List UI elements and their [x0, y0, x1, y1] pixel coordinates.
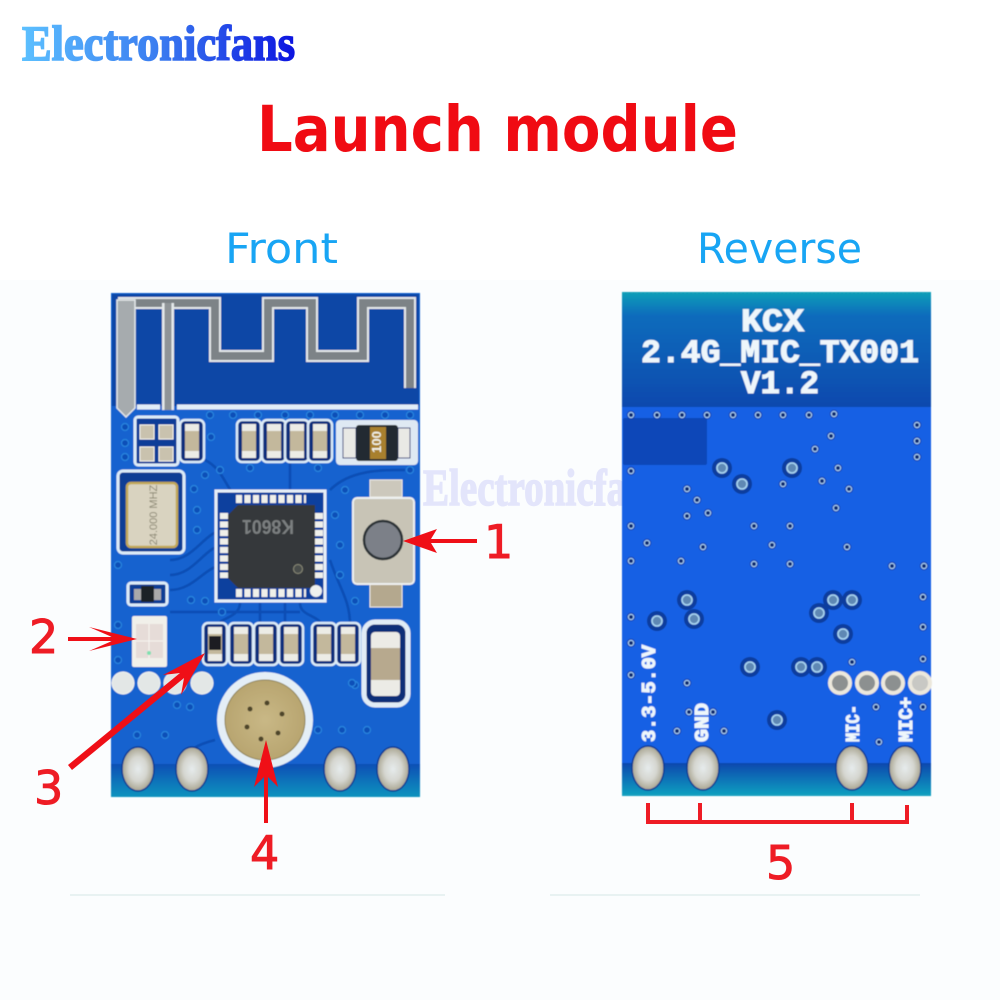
arrow 3: [68, 653, 205, 770]
crystal oscillator: [118, 471, 184, 553]
dark copper patch: [623, 418, 707, 465]
panel: front board: [111, 293, 420, 797]
title: Launch module: [257, 93, 738, 166]
bottom edge strip: [111, 764, 420, 797]
solder pads: [122, 747, 409, 791]
silkscreen: pin labels: GND: [692, 703, 714, 742]
bottom edge strip: [622, 763, 931, 796]
label 1: 1: [484, 515, 513, 569]
heading: reverse: Reverse: [697, 224, 862, 273]
board substrate: [622, 407, 931, 796]
watermark: Electronicfans: [423, 460, 663, 517]
arrow 1: [403, 529, 477, 553]
board substrate: [111, 293, 420, 797]
LED: [132, 616, 167, 667]
large vias: [647, 458, 862, 730]
silkscreen: pin labels: MIC+: [896, 697, 918, 742]
component row: [203, 623, 360, 665]
silkscreen: model name: V1.2: [741, 366, 819, 403]
antenna keep-out zone: [112, 294, 419, 406]
antenna divider line: [137, 404, 418, 410]
silkscreen: model name: [641, 304, 919, 403]
microcontroller chip: [216, 491, 325, 601]
push button switch: [353, 480, 414, 607]
microcontroller chip: K8601: [242, 515, 294, 537]
bracket: pins: [648, 803, 907, 822]
silkscreen: pin labels: MIC-: [843, 705, 865, 742]
resistor row: [237, 420, 332, 462]
silkscreen: pin labels: [639, 644, 918, 742]
brand logo: Electronicfans: [22, 15, 295, 71]
silkscreen: pin labels: 3.3-5.0V: [639, 644, 661, 742]
arrow 2: [68, 627, 137, 651]
transistor: [128, 583, 167, 605]
label 3: 3: [34, 761, 63, 815]
silkscreen: model name: 2.4G_MIC_TX001: [641, 335, 919, 372]
four-pad component: [135, 417, 178, 465]
crystal oscillator: 24.000 MHZ: [148, 484, 160, 545]
board vias: [114, 412, 414, 738]
small resistor: [180, 420, 204, 462]
capacitor: [364, 622, 408, 705]
panel: reverse board: [622, 292, 931, 796]
top antenna zone: [622, 292, 931, 407]
label 5: 5: [766, 836, 795, 890]
label 2: 2: [29, 610, 58, 664]
microphone: [217, 672, 313, 768]
inductor: 100: [369, 431, 384, 453]
label 4: 4: [250, 826, 279, 880]
small vias: [627, 410, 928, 746]
antenna trace: [117, 300, 410, 417]
copper traces: [170, 460, 405, 760]
header pads: [830, 673, 930, 693]
solder pads: [632, 746, 921, 790]
through-hole pads row: [112, 672, 213, 694]
background: [0, 280, 1000, 1000]
inductor: [336, 420, 418, 465]
heading: front: Front: [225, 224, 338, 273]
silkscreen: model name: KCX: [741, 304, 805, 341]
arrow 4: [254, 740, 278, 823]
